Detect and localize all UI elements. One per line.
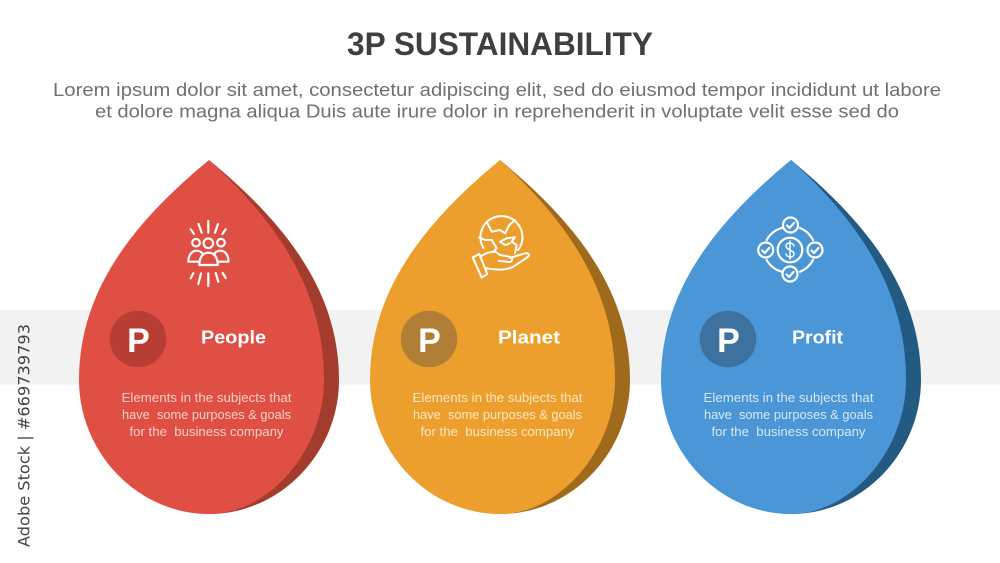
description: have some purposes & goals <box>413 407 582 422</box>
intro text: Lorem ipsum dolor sit amet, consectetur adipiscing elit, sed do eiusmod tempor incididunt ut labore <box>53 80 941 100</box>
badge: P <box>401 311 457 367</box>
icon: globe in hand <box>473 216 529 278</box>
background band <box>0 310 1000 384</box>
description: for the business company <box>130 424 284 439</box>
label: Profit: Profit <box>792 326 843 347</box>
description: have some purposes & goals <box>704 407 873 422</box>
intro text <box>53 80 941 122</box>
description: for the business company <box>712 424 866 439</box>
badge: P: P <box>127 322 150 360</box>
panel: planet <box>370 160 630 514</box>
description: Elements in the subjects that <box>122 390 292 405</box>
label: Planet: Planet <box>498 326 560 347</box>
badge: P: P <box>418 322 441 360</box>
label: People: People <box>201 326 266 347</box>
title: 3P SUSTAINABILITY <box>347 26 653 62</box>
description: for the business company <box>420 424 575 439</box>
intro text: et dolore magna aliqua Duis aute irure dolor in reprehenderit in voluptate velit esse sed do <box>95 102 899 122</box>
description: Elements in the subjects that <box>704 390 874 405</box>
panel: people <box>79 160 339 514</box>
icon: people <box>188 221 228 286</box>
description: have some purposes & goals <box>122 407 291 422</box>
description <box>704 390 874 439</box>
badge: P <box>700 311 756 367</box>
description: Elements in the subjects that <box>412 390 583 405</box>
panel: profit <box>661 160 921 514</box>
badge: P <box>110 311 166 367</box>
badge: P: P <box>717 322 740 360</box>
description <box>412 390 583 439</box>
description <box>122 390 292 439</box>
icon: dollar with checks <box>758 218 822 282</box>
stock id text: Adobe Stock | #669739793 <box>14 324 34 547</box>
